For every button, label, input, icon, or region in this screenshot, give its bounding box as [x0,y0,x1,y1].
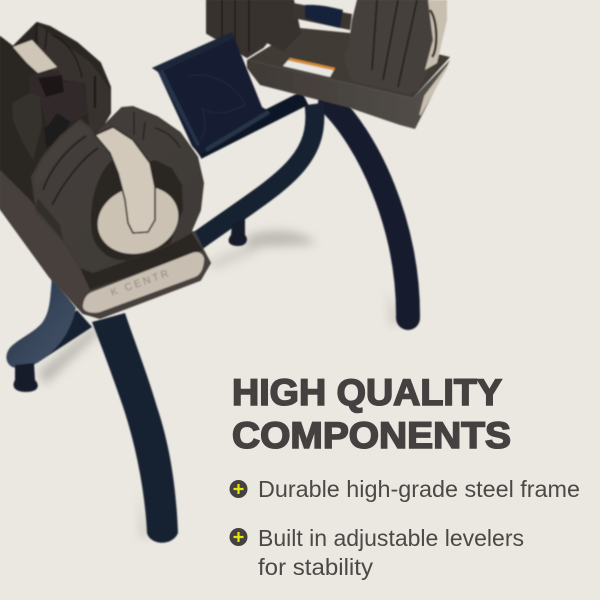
right dumbbell right weight [345,0,447,93]
right tray [247,28,450,129]
middle arc leg with leveler [196,104,315,246]
right dumbbell handle [293,3,352,30]
crossbar [198,98,305,152]
bullet: levelers: Built in adjustable levelers [258,525,524,551]
warning label [283,58,335,77]
icon: plus [230,480,248,498]
back left weight stack [0,23,110,170]
back left leg [6,277,92,392]
front leg [92,313,178,543]
right dumbbell left weight [207,0,300,57]
left dumbbell and tray [0,23,210,318]
middle dumbbell body [12,40,88,160]
dumbbell stand frame [6,98,408,543]
front dumbbell beige wheel [89,176,187,264]
left tray [0,165,210,318]
bullet: levelers: for stability [258,554,373,580]
front dumbbell beige strap [95,127,155,233]
back right leg [330,103,408,318]
floor shadows [38,231,398,540]
heading [232,372,511,456]
bullet: levelers [230,525,524,580]
heading: HIGH QUALITY [232,372,502,413]
heading: COMPONENTS [232,415,511,456]
icon: plus [230,528,248,546]
right dumbbell and tray [207,0,450,129]
CENTR logo: K CENTR [109,267,172,299]
bullet: steel frame: Durable high-grade steel frame [258,476,580,502]
blue accessory plate [152,32,270,155]
front dumbbell weight [32,107,203,272]
